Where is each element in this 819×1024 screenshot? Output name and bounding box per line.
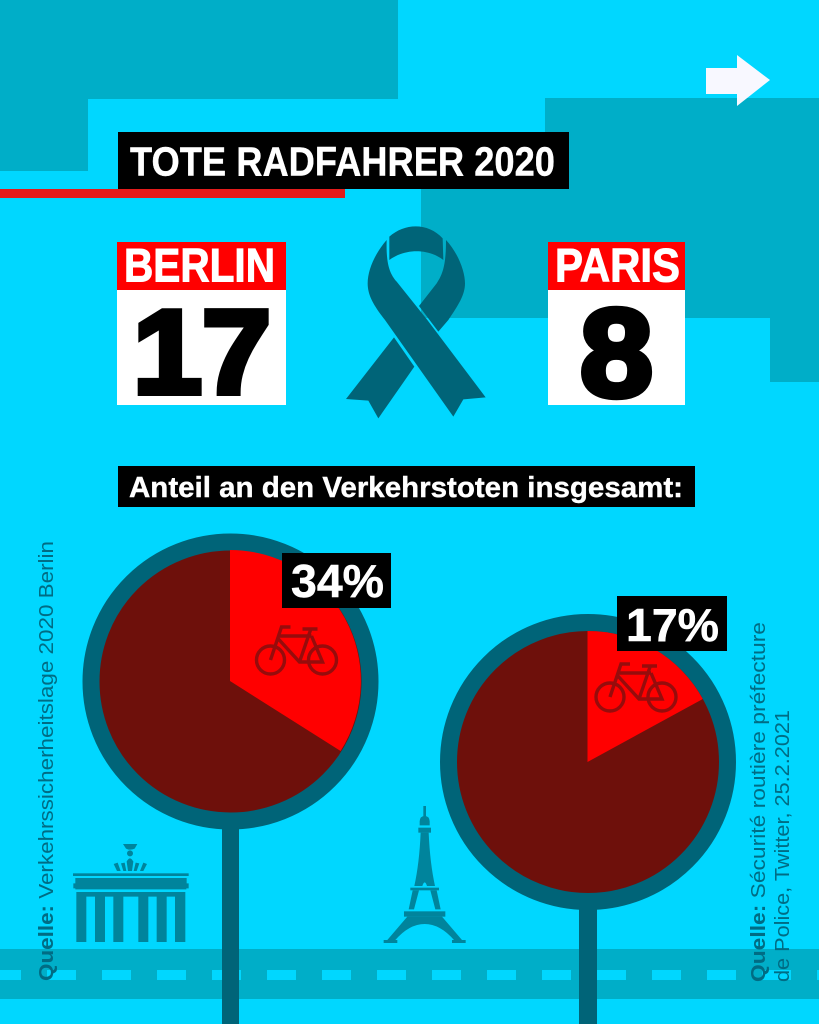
icon: ribbon [346, 226, 486, 418]
subtitle: Anteil an den Verkehrstoten insgesamt: [129, 472, 683, 504]
source: Berlin: Quelle: Verkehrssicherheitslage 2020 Berlin [36, 541, 58, 981]
label: 17%: 17% [626, 599, 719, 651]
panel: Berlin count: 17 [133, 286, 271, 419]
road [0, 949, 819, 999]
panel: Berlin count [117, 238, 286, 419]
red accent bar [0, 189, 345, 198]
panel: Paris count: 8 [580, 284, 653, 423]
icon: arrow [706, 55, 770, 106]
panel: Berlin count: BERLIN [124, 238, 275, 292]
icon: Brandenburg Gate [73, 844, 189, 942]
chart: Paris pie sign [448, 622, 728, 1024]
icon: bicycle Paris [596, 664, 676, 711]
panel: Paris count [548, 238, 685, 423]
icon: bicycle Berlin [256, 627, 336, 674]
source: Paris: de Police, Twitter, 25.2.2021 [772, 710, 794, 982]
source: Paris [748, 622, 794, 982]
title: TOTE RADFAHRER 2020 [130, 138, 555, 184]
icon: Eiffel Tower [384, 806, 466, 943]
panel: Paris count: PARIS [555, 238, 680, 292]
label: 34%: 34% [291, 555, 384, 607]
source: Paris: Quelle: Sécurité routière préfecture [748, 622, 770, 982]
chart: Berlin pie sign [91, 542, 370, 1024]
